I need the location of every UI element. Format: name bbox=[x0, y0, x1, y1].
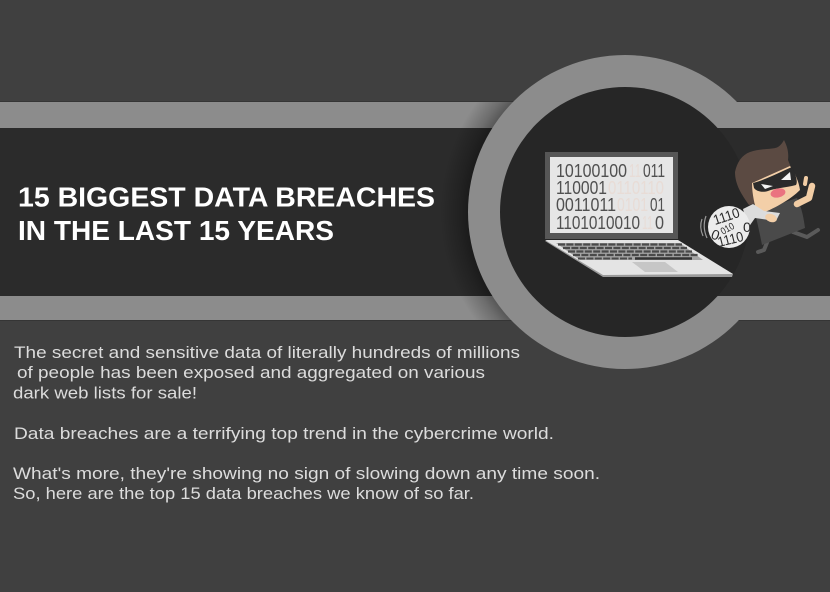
grey ring and dark circle bbox=[468, 55, 830, 369]
icon: masked thief with binary sack bbox=[701, 140, 818, 252]
thief head bbox=[735, 140, 800, 215]
header band bbox=[0, 101, 830, 321]
laptop screen: 110001 bbox=[556, 178, 607, 198]
infographic canvas bbox=[0, 55, 830, 502]
title: 15 BIGGEST DATA BREACHES bbox=[18, 182, 435, 212]
intro text: So, here are the top 15 data breaches we know of so far. bbox=[13, 484, 474, 503]
thief body bbox=[755, 198, 805, 245]
laptop screen: 1101010010 bbox=[556, 213, 640, 233]
intro text: dark web lists for sale! bbox=[13, 384, 197, 402]
laptop screen: 0101 bbox=[617, 195, 648, 215]
laptop screen: 011 bbox=[643, 161, 665, 181]
laptop screen: 0110110 bbox=[608, 178, 664, 198]
intro text: of people has been exposed and aggregated on various bbox=[17, 363, 485, 382]
title: IN THE LAST 15 YEARS bbox=[18, 215, 334, 246]
laptop screen: 01 bbox=[650, 195, 665, 215]
laptop screen: 10100100 bbox=[556, 161, 627, 181]
laptop screen: 11 bbox=[629, 161, 641, 181]
laptop keyboard base bbox=[545, 240, 733, 277]
intro text: What's more, they're showing no sign of slowing down any time soon. bbox=[13, 464, 600, 483]
laptop screen: 0011011 bbox=[556, 195, 616, 215]
thief legs bbox=[758, 230, 818, 252]
intro text: The secret and sensitive data of literally hundreds of millions bbox=[14, 343, 520, 362]
binary sack: 010 bbox=[719, 221, 737, 238]
binary sack: 1110 bbox=[711, 204, 742, 228]
title bbox=[18, 182, 435, 246]
icon: laptop bbox=[545, 152, 733, 277]
binary sack: 1110 bbox=[716, 228, 745, 250]
binary sack bbox=[701, 204, 780, 250]
laptop screen: 11 bbox=[642, 213, 653, 233]
intro text bbox=[13, 343, 600, 503]
binary sack: 0 bbox=[709, 226, 722, 244]
laptop screen: 0 bbox=[655, 213, 664, 233]
thief raised arm bbox=[797, 178, 812, 204]
laptop screen bbox=[545, 152, 678, 239]
binary sack: 0 bbox=[743, 219, 751, 235]
ring shadow bbox=[456, 102, 513, 320]
intro text: Data breaches are a terrifying top trend in the cybercrime world. bbox=[14, 424, 554, 443]
